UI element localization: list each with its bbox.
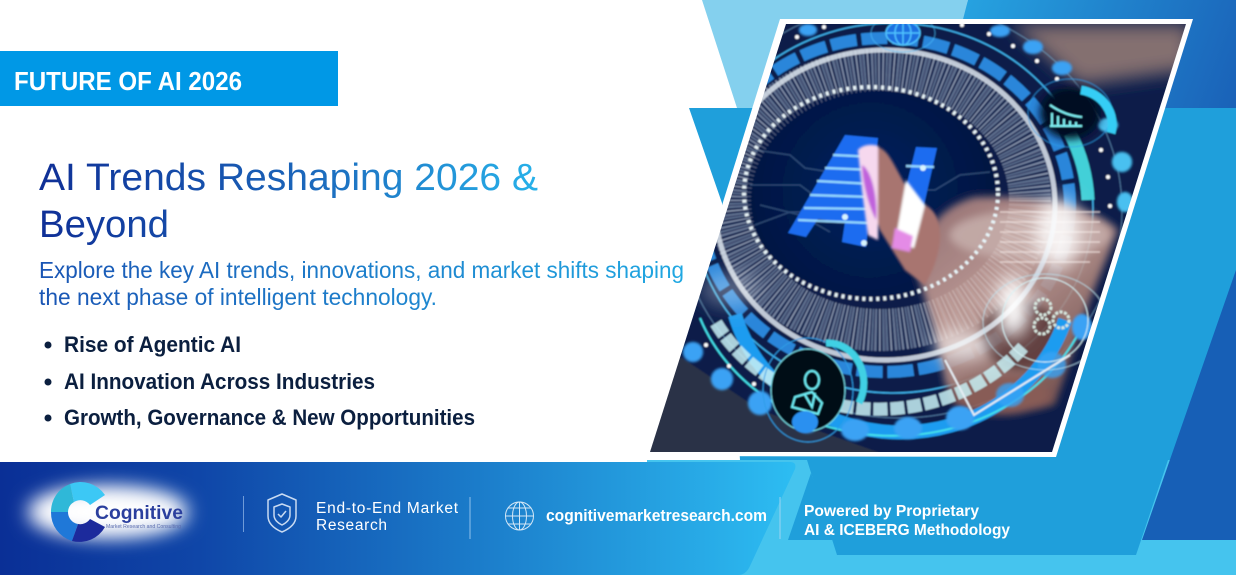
feature: end-to-end market research: End-to-End Market <box>316 500 459 517</box>
header tag text: FUTURE OF AI 2026 <box>14 66 242 96</box>
AI letters <box>788 135 937 253</box>
icon: gears badge <box>983 274 1107 370</box>
bullet list: Rise of Agentic AI <box>64 332 241 357</box>
title <box>39 157 538 246</box>
photo: futuristic AI touch interface <box>650 24 1186 452</box>
circuit traces <box>750 150 990 232</box>
panel: photo with white frame <box>640 2 1200 460</box>
logo mark <box>51 482 105 542</box>
subtitle paragraph: the next phase of intelligent technology. <box>39 284 437 310</box>
title: AI Trends Reshaping 2026 & <box>39 157 538 199</box>
logo: Cognitive <box>28 482 188 542</box>
divider <box>242 496 244 532</box>
divider <box>469 497 471 539</box>
website link text: cognitivemarketresearch.com <box>546 507 767 525</box>
header tag <box>0 51 338 106</box>
background shape: mid blue panel <box>689 108 1236 555</box>
ring of white dots <box>744 87 998 299</box>
methodology text: Powered by Proprietary <box>804 503 979 520</box>
outer dial rings <box>678 2 1122 418</box>
logo tagline: Market Research and Consulting <box>106 524 181 530</box>
feature: end-to-end market research: Research <box>316 517 387 534</box>
background shape: light blue bottom band <box>647 460 1236 575</box>
photo frame <box>644 19 1193 457</box>
inner circle core <box>747 90 995 296</box>
pointer lines <box>945 355 1070 415</box>
title: Beyond <box>39 204 169 246</box>
bullet list: Growth, Governance & New Opportunities <box>64 405 475 430</box>
divider <box>779 497 781 539</box>
pale light stripes across hand <box>1000 212 1100 262</box>
logo wordmark: Cognitive <box>95 503 183 524</box>
icon: globe <box>506 502 534 530</box>
footer bar <box>0 462 795 575</box>
icon: shield <box>268 494 296 532</box>
background shape: dark blue right wedge <box>1142 270 1236 540</box>
icon: chart badge <box>1028 79 1112 147</box>
bullet list: AI Innovation Across Industries <box>64 369 375 394</box>
background shape: light blue top slant <box>702 0 968 108</box>
subtitle paragraph: Explore the key AI trends, innovations, and market shifts shaping <box>39 257 684 283</box>
background shape: mid blue triangle behind footer <box>788 473 835 540</box>
white light glare <box>700 197 1080 359</box>
logo glow <box>28 488 188 536</box>
bullet list <box>44 332 475 430</box>
hand <box>915 197 1118 415</box>
dial rings over the hand <box>700 50 1085 436</box>
methodology text <box>804 503 1010 539</box>
glowing blue nodes <box>683 24 1133 441</box>
icon: globe badge <box>869 24 937 54</box>
methodology text: AI & ICEBERG Methodology <box>804 522 1010 539</box>
feature: end-to-end market research <box>316 500 459 534</box>
background shape: dark blue top right block <box>940 0 1236 108</box>
icon: person badge <box>763 338 864 442</box>
finger <box>858 145 940 285</box>
subtitle paragraph <box>39 257 684 310</box>
small white dots <box>704 23 1112 386</box>
